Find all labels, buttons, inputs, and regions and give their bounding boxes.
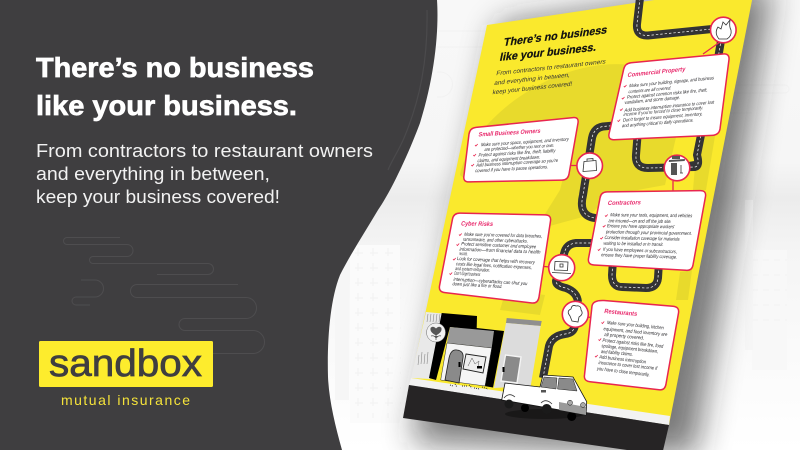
card: Restaurants: Make sure your building, kitchen	[606, 320, 664, 331]
flyer intro text	[492, 59, 606, 96]
card: Restaurants: equipment, and food inventory are	[603, 326, 668, 338]
flyer title: like your business.	[499, 42, 598, 64]
subheading text: and everything in between,	[36, 164, 270, 184]
awning	[447, 327, 494, 348]
card: Cyber Risks: Don’t forget business	[454, 271, 481, 278]
window	[463, 354, 486, 373]
card: Small Business Owners: Make sure your space, equipment, and inventory	[480, 137, 570, 148]
card: Contractors: ensure they have proper liability coverage.	[601, 252, 678, 261]
card: Cyber Risks: costs like legal fees, notification expenses,	[455, 261, 532, 271]
card: Commercial Property: Make sure your building, signage, and business	[629, 75, 715, 89]
logo: sandbox mutual insurance: mutual insurance	[61, 392, 190, 408]
card: Restaurants: Add business interruption	[599, 354, 647, 365]
icon: laptop	[549, 255, 575, 281]
card: Commercial Property: income if you’re forced to close temporarily.	[623, 105, 704, 118]
card: Small Business Owners: are protected—whether you rent or own.	[484, 143, 555, 153]
card: Commercial Property: Commercial Property	[627, 66, 686, 79]
card: Cyber Risks: Look for coverage that helps with recovery	[456, 256, 536, 266]
flyer drop shadow	[412, 0, 772, 450]
card: Contractors: Make sure your tools, equipment, and vehicles	[610, 212, 693, 219]
card: Small Business Owners: Add business interruption coverage so you’re	[476, 158, 559, 169]
logo: sandbox mutual insurance	[39, 341, 213, 408]
second building	[494, 318, 542, 388]
flyer watermark shapes	[460, 64, 716, 315]
flyer road network	[543, 0, 722, 378]
card: Contractors	[588, 191, 706, 270]
card: Restaurants: insurance to cover lost income if	[598, 360, 658, 372]
card: Cyber Risks: Cyber Risks	[460, 221, 494, 228]
shop facade	[441, 343, 492, 386]
card: Small Business Owners: Protect against risks like fire, theft, liability	[478, 148, 556, 159]
arched door	[445, 350, 463, 383]
card: Contractors: Consider installation coverage for materials	[604, 235, 681, 243]
illustration: storefronts	[411, 312, 542, 388]
card: Cyber Risks: Protect sensitive customer and employee	[461, 241, 537, 250]
card: Cyber Risks: Make sure you’re covered for data breaches,	[464, 232, 543, 240]
left lot	[411, 312, 442, 379]
card: Contractors: Contractors	[607, 199, 642, 207]
card: Cyber Risks: information—from financial data to health	[459, 247, 541, 256]
icon: briefcase	[577, 153, 602, 178]
heading: like your business.	[36, 90, 297, 121]
card: Cyber Risks: records.	[459, 251, 468, 257]
card: Small Business Owners: covered if you have to pause operations.	[475, 164, 549, 174]
card: Small Business Owners: Small Business Owners	[478, 128, 542, 138]
card: Commercial Property: and anything critical to daily operations.	[621, 118, 694, 129]
card: Contractors: Ensure you have appropriate workers’	[606, 223, 675, 230]
card: Restaurants: spoilage, equipment breakdown,	[601, 343, 659, 355]
card: Cyber Risks: and system restoration.	[455, 266, 491, 274]
card: Commercial Property: Add business interruption insurance to cover lost	[624, 100, 715, 114]
flyer title	[499, 24, 608, 64]
heading	[36, 52, 314, 121]
black building	[429, 313, 504, 388]
subheading text: keep your business covered!	[36, 187, 280, 207]
card: Cyber Risks: interruption—cyberattacks can shut you	[453, 277, 528, 287]
card: Contractors: waiting to be installed or in transit.	[603, 241, 664, 248]
connector lines	[538, 42, 720, 318]
icon: food	[562, 301, 588, 327]
panel: dark wave background	[0, 0, 437, 450]
card: Cyber Risks	[439, 213, 551, 303]
icon: flame	[710, 17, 736, 43]
card: Contractors: are insured—on and off the job site.	[608, 218, 672, 225]
logo: sandbox mutual insurance: sandbox	[49, 343, 202, 385]
card: Restaurants: all property covered.	[604, 332, 645, 342]
flyer intro text: and everything in between,	[494, 72, 571, 87]
icon: building tools	[664, 155, 690, 181]
card: Cyber Risks: ransomware, and other cyberattacks.	[462, 237, 528, 245]
card: Commercial Property: Protect against common risks like fire, theft,	[626, 87, 708, 101]
card: Restaurants: and liability claims.	[600, 349, 633, 358]
flyer intro text: keep your business covered!	[492, 81, 573, 96]
card: Contractors: protection through your provincial government.	[605, 229, 692, 237]
flyer yellow sheet	[411, 0, 755, 425]
subheading text	[36, 141, 373, 207]
card: Contractors: If you have employees or subcontractors,	[602, 247, 677, 255]
road surface	[403, 385, 669, 450]
flyer intro text: From contractors to restaurant owners	[496, 59, 606, 77]
card: Commercial Property: contents are all covered.	[628, 85, 672, 95]
card: Commercial Property: vandalism, and storm damage.	[624, 95, 681, 106]
heading: There’s no business	[36, 52, 314, 83]
icon: flower sign	[426, 323, 446, 342]
flyer title: There’s no business	[503, 24, 608, 49]
subheading text: From contractors to restaurant owners	[36, 141, 373, 161]
card: Restaurants: you have to close temporarily.	[596, 366, 650, 378]
card: Restaurants: Protect against risks like fire, food	[602, 338, 664, 350]
card: Cyber Risks: down just like a fire or flood.	[452, 281, 503, 290]
card: Small Business Owners: claims, and equipment breakdown.	[477, 155, 541, 164]
card: Commercial Property: Don’t forget to insure equipment, inventory,	[622, 111, 703, 124]
card: Small Business Owners	[464, 118, 578, 182]
sidewalk	[409, 378, 670, 425]
card: Restaurants: Restaurants	[604, 308, 638, 318]
card: Restaurants	[584, 300, 679, 390]
illustration: truck	[502, 375, 587, 421]
card: Commercial Property	[609, 54, 729, 140]
flyer page	[403, 0, 755, 450]
decorative road lines	[64, 238, 265, 354]
